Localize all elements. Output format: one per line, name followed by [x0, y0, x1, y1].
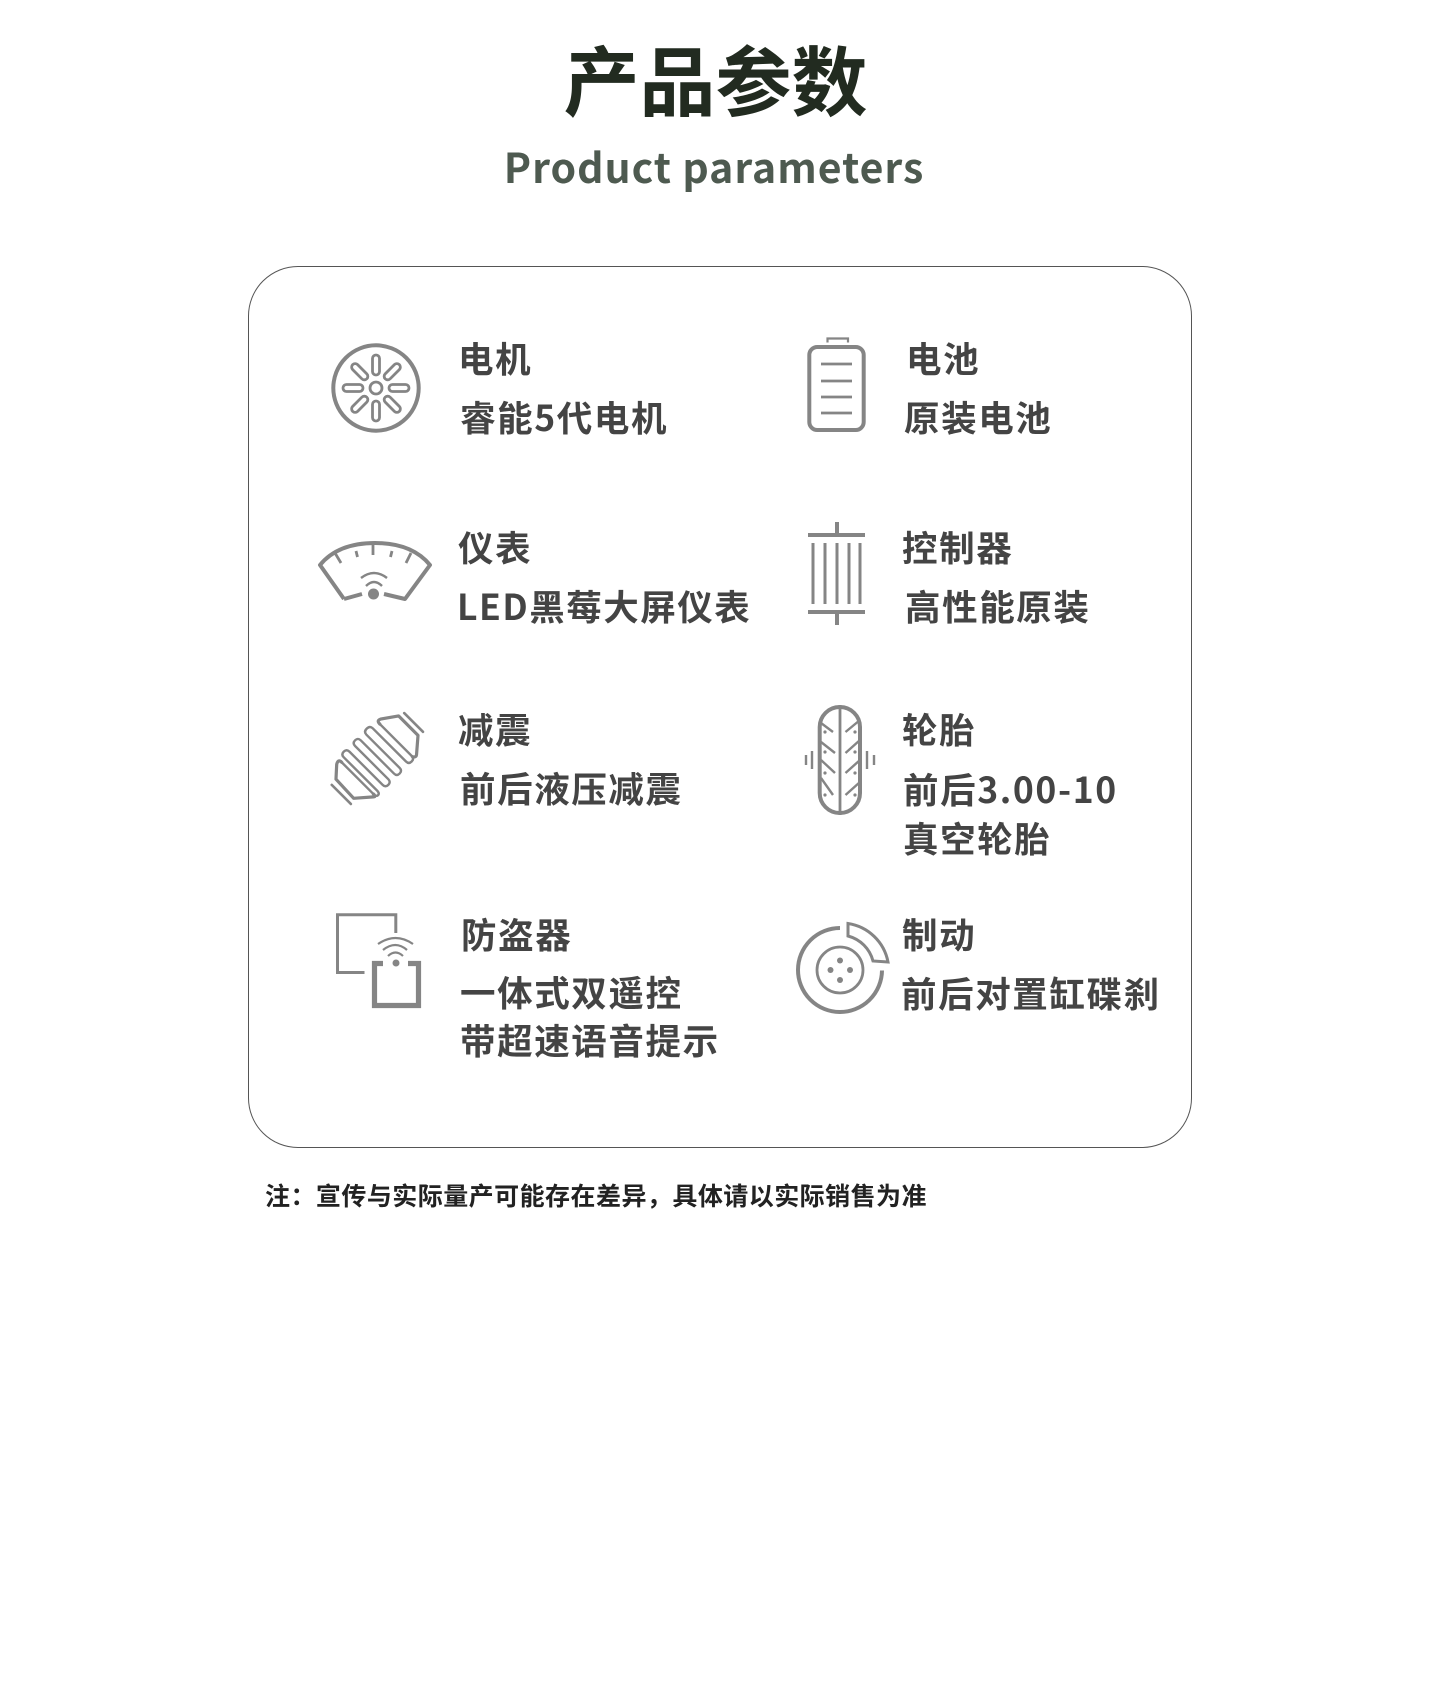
item: brake [796, 908, 1161, 1018]
icon: dashboard gauge [318, 541, 432, 601]
title: 产品参数 [564, 22, 868, 132]
value: tire [903, 763, 1118, 863]
panel: specifications card [248, 266, 1192, 1148]
icon: tire [804, 705, 876, 815]
item: motor [331, 332, 668, 442]
item: controller [808, 521, 1091, 631]
value: anti-theft: 带超速语音提示 [460, 1014, 720, 1065]
value: meter: LED黑莓大屏仪表 [457, 580, 751, 631]
item: anti-theft [336, 908, 720, 1065]
value: tire: 前后3.00-10 [903, 763, 1118, 814]
value: anti-theft [460, 966, 720, 1065]
item: shock absorber [330, 703, 683, 813]
subtitle: Product parameters [504, 135, 924, 195]
icon: shock absorber spring [330, 712, 424, 806]
value: shock absorber: 前后液压减震 [460, 762, 683, 813]
value: battery: 原装电池 [904, 391, 1052, 442]
value: controller: 高性能原装 [905, 580, 1091, 631]
heading: controller: 控制器 [902, 521, 1013, 572]
item: tire [804, 703, 1118, 863]
value: tire: 真空轮胎 [903, 812, 1051, 863]
heading: brake: 制动 [902, 908, 976, 959]
heading: battery: 电池 [906, 332, 980, 383]
item: meter [318, 521, 751, 631]
value: brake: 前后对置缸碟刹 [901, 967, 1161, 1018]
footnote: 注：宣传与实际量产可能存在差异，具体请以实际销售为准 [265, 1176, 927, 1212]
heading: shock absorber: 减震 [458, 703, 532, 754]
icon: battery [807, 337, 866, 432]
heading: motor: 电机 [458, 332, 532, 383]
icon: anti-theft remote [336, 913, 422, 1008]
icon: motor wheel [331, 343, 421, 433]
heading: tire: 轮胎 [902, 703, 976, 754]
icon: brake disc [796, 922, 890, 1014]
icon: controller [808, 522, 865, 625]
heading: meter: 仪表 [458, 521, 532, 572]
value: anti-theft: 一体式双遥控 [460, 966, 683, 1017]
value: motor: 睿能5代电机 [460, 391, 668, 442]
item: battery [807, 332, 1052, 442]
heading: anti-theft: 防盗器 [461, 908, 572, 959]
